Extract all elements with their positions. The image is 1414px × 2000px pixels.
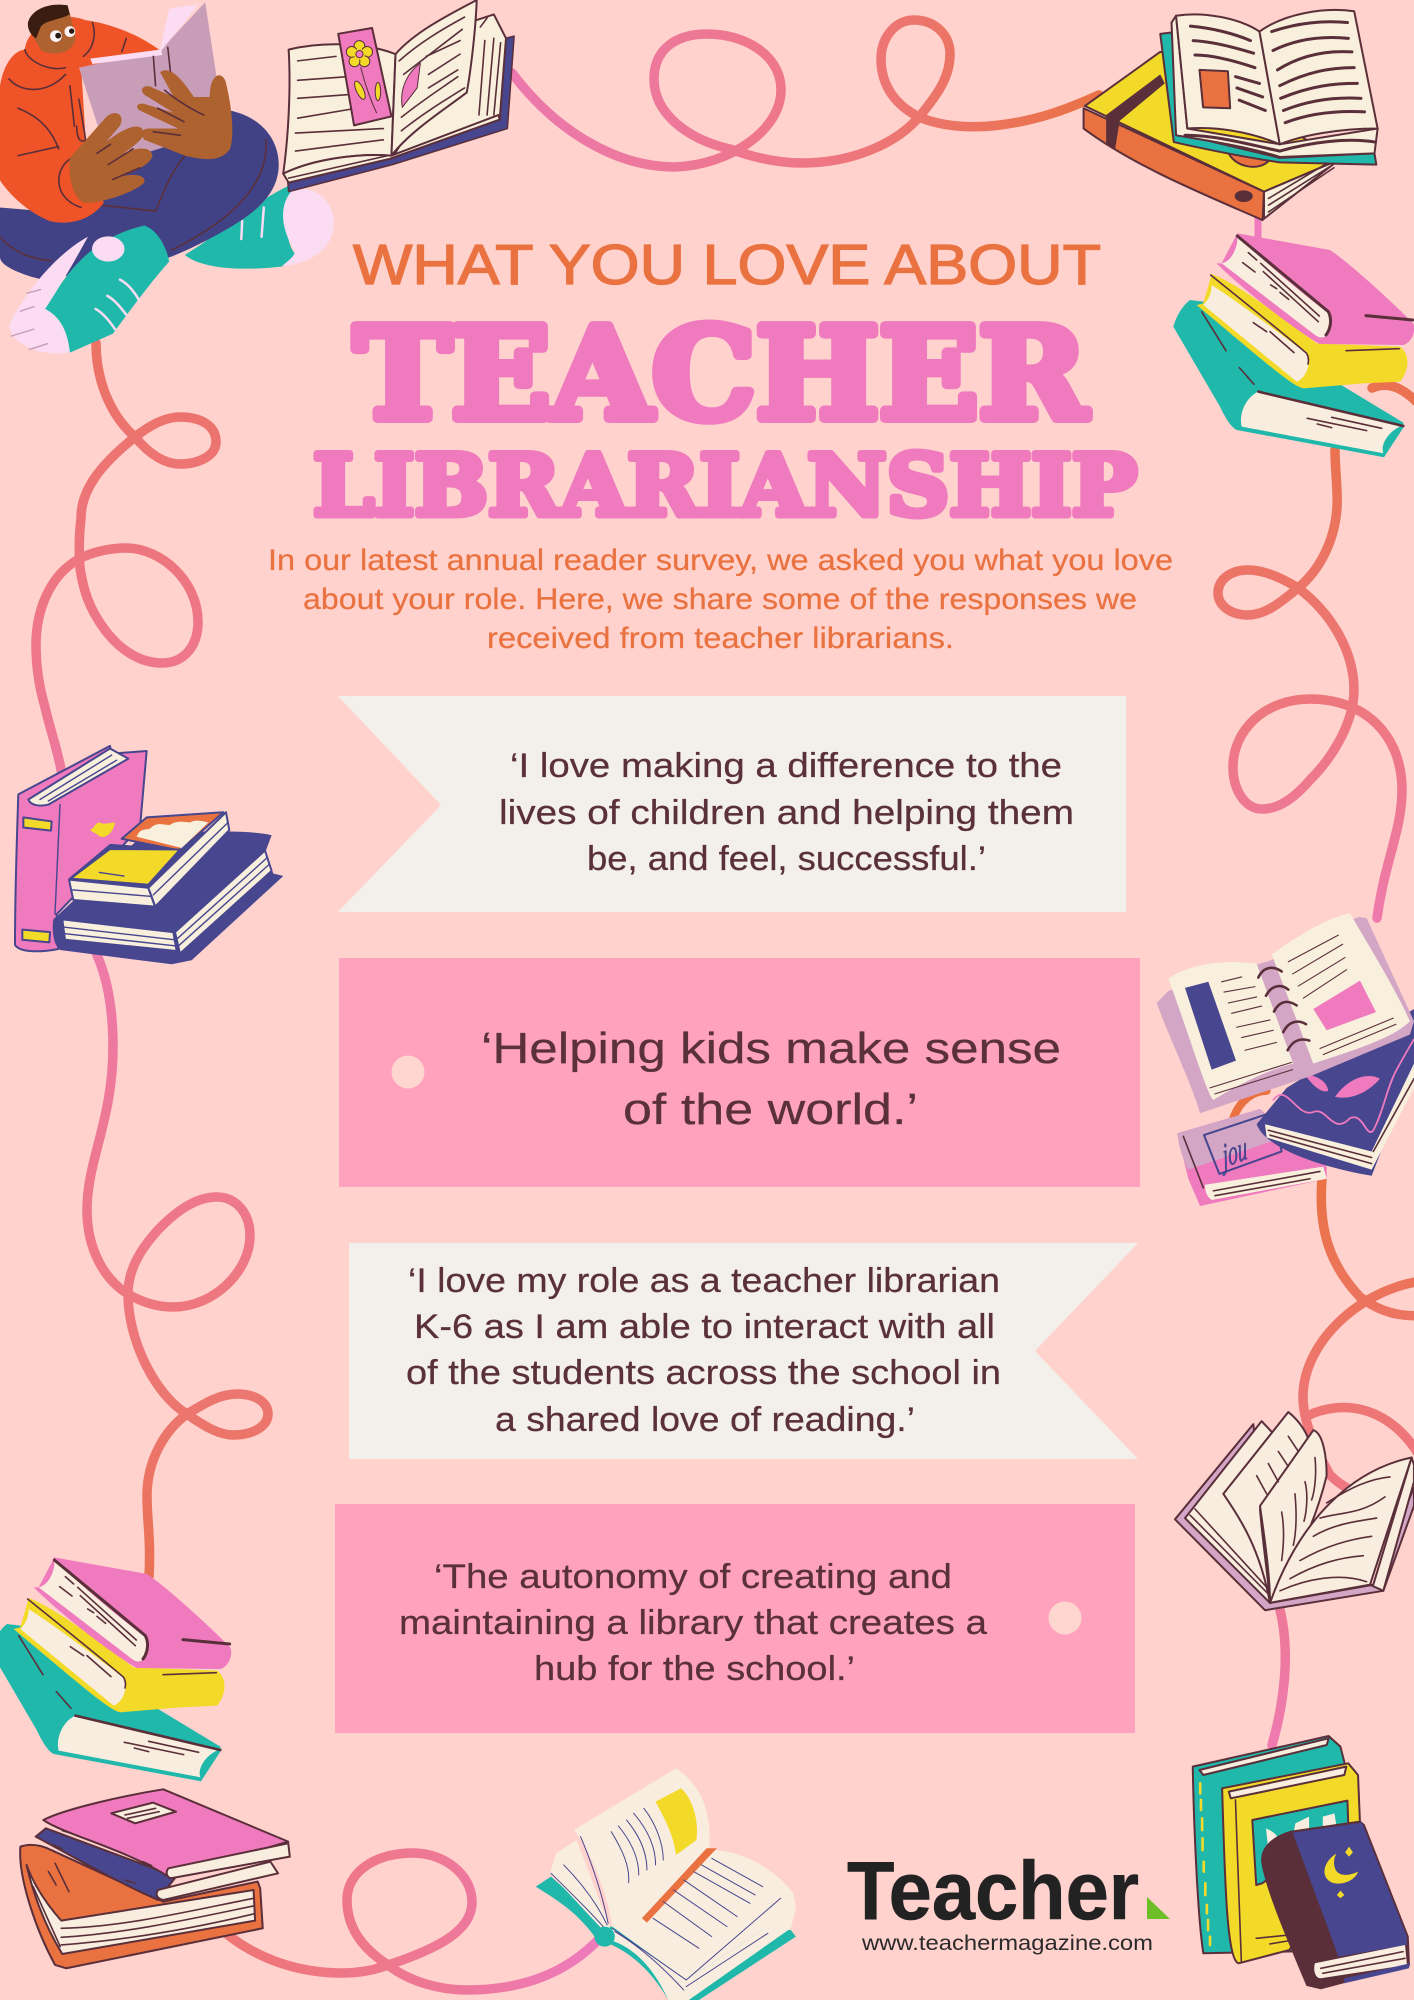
quote 4 text: maintaining a library that creates a <box>399 1604 988 1642</box>
page corner <box>1264 160 1338 219</box>
page block <box>1172 16 1378 157</box>
right page <box>1270 1458 1412 1603</box>
illustration: open book bottom centre <box>536 1768 796 2000</box>
decorative ribbon: bottom <box>228 1853 600 1990</box>
navy book <box>53 831 283 964</box>
dot <box>392 1056 424 1088</box>
open book held <box>79 2 216 153</box>
navy book <box>1257 1009 1414 1176</box>
hoodie <box>0 17 160 223</box>
quote 2 text: of the world.’ <box>623 1085 918 1134</box>
decorative ribbon: left side <box>36 343 268 1577</box>
page left <box>283 44 396 174</box>
flower <box>346 41 373 67</box>
journal lettering: jou <box>1218 1129 1249 1177</box>
panel: quote 3 <box>349 1243 1138 1459</box>
teal book <box>1193 1736 1360 1953</box>
left pages <box>1185 1421 1290 1603</box>
orange cover <box>20 1845 263 1968</box>
panel: quote 4 <box>335 1504 1135 1733</box>
quote 3 text <box>406 1262 1001 1439</box>
illustration: stacked books top right <box>1084 10 1378 220</box>
quote 3 text: a shared love of reading.’ <box>495 1401 915 1439</box>
intro paragraph: In our latest annual reader survey, we asked you what you love <box>268 544 1173 577</box>
intro paragraph <box>268 544 1173 655</box>
illustration: orange pink stacked books bottom left <box>20 1789 290 1968</box>
pink standing book <box>15 746 147 951</box>
front foot <box>45 226 169 353</box>
website address: www.teachermagazine.com <box>861 1932 1153 1955</box>
yellow book <box>1222 1763 1360 1963</box>
panel: quote 1 <box>338 696 1126 912</box>
orange picture <box>1199 70 1230 108</box>
illustration: stacked books left <box>0 1557 231 1781</box>
illustration: yellow teal moon books bottom right <box>1193 1736 1410 1988</box>
leaf image <box>402 63 420 107</box>
quote 3 text: ‘I love my role as a teacher librarian <box>408 1262 1000 1300</box>
pages <box>550 1840 612 1940</box>
illustration: open book right <box>1175 1412 1414 1610</box>
illustration: open book with bookmark <box>283 0 514 192</box>
dot <box>1048 1602 1082 1634</box>
intro paragraph: received from teacher librarians. <box>487 622 954 655</box>
orange half circle <box>1228 151 1271 167</box>
dark strap <box>1106 74 1165 149</box>
illustration: journal stack right <box>1157 913 1414 1206</box>
quote 4 text <box>399 1558 988 1688</box>
quote 2 text <box>481 1024 1061 1134</box>
quote 4 text: ‘The autonomy of creating and <box>434 1558 952 1596</box>
quote 3 text: of the students across the school in <box>406 1354 1001 1392</box>
pages <box>27 1865 255 1954</box>
illustration: person reading <box>0 2 334 353</box>
title block <box>313 233 1137 535</box>
heading: librarianship: LIBRARIANSHIP <box>313 436 1137 535</box>
quote 3 text: K-6 as I am able to interact with all <box>414 1308 995 1346</box>
quote 1 text: be, and feel, successful.’ <box>587 840 986 878</box>
spine knot <box>594 1927 615 1947</box>
quote 1 text: ‘I love making a difference to the <box>510 747 1062 785</box>
illustration: purple and pink books left <box>15 746 283 964</box>
quote 1 text: lives of children and helping them <box>499 794 1074 832</box>
orange spine <box>1084 108 1264 220</box>
teal cover <box>536 1877 796 2000</box>
illustration: stacked books right <box>1173 233 1414 457</box>
navy book <box>36 1828 176 1900</box>
back foot <box>185 186 298 269</box>
logo: Teacher wordmark: Teacher <box>847 1844 1139 1937</box>
ribbon marker <box>642 1848 717 1923</box>
yellow cover <box>1085 52 1338 192</box>
moon book <box>1262 1822 1409 1988</box>
head <box>34 14 76 53</box>
hands <box>137 70 232 159</box>
quote 2 text: ‘Helping kids make sense <box>481 1024 1061 1073</box>
heading: what you love about: WHAT YOU LOVE ABOUT <box>353 233 1101 297</box>
logo: green triangle <box>1147 1897 1170 1919</box>
middle leaves <box>1223 1412 1308 1603</box>
heading: teacher: TEACHER <box>354 300 1088 448</box>
navy cover <box>287 36 514 192</box>
quote 4 text: hub for the school.’ <box>534 1650 855 1688</box>
bookmark <box>338 28 391 125</box>
teal book <box>1160 32 1376 165</box>
page block right <box>392 14 506 158</box>
orange ribbon piece <box>1233 1091 1267 1118</box>
mauve cover <box>1175 1424 1414 1610</box>
text lines <box>551 1808 781 1990</box>
book label <box>111 1803 176 1823</box>
intro paragraph: about your role. Here, we share some of the responses we <box>303 583 1137 616</box>
quote 1 text <box>499 747 1074 878</box>
decorative ribbon: right side <box>1218 205 1414 1745</box>
moon and stars <box>1324 1853 1358 1884</box>
yellow block <box>656 1788 697 1855</box>
pink journal <box>1177 1109 1327 1206</box>
page right <box>391 0 477 156</box>
panel: quote 2 <box>339 958 1140 1187</box>
pink book <box>43 1789 288 1877</box>
top book <box>122 812 223 851</box>
spiral notebook <box>1157 917 1414 1113</box>
legs <box>0 110 279 280</box>
decorative ribbon: top <box>512 20 1099 167</box>
open pages <box>1176 14 1280 144</box>
